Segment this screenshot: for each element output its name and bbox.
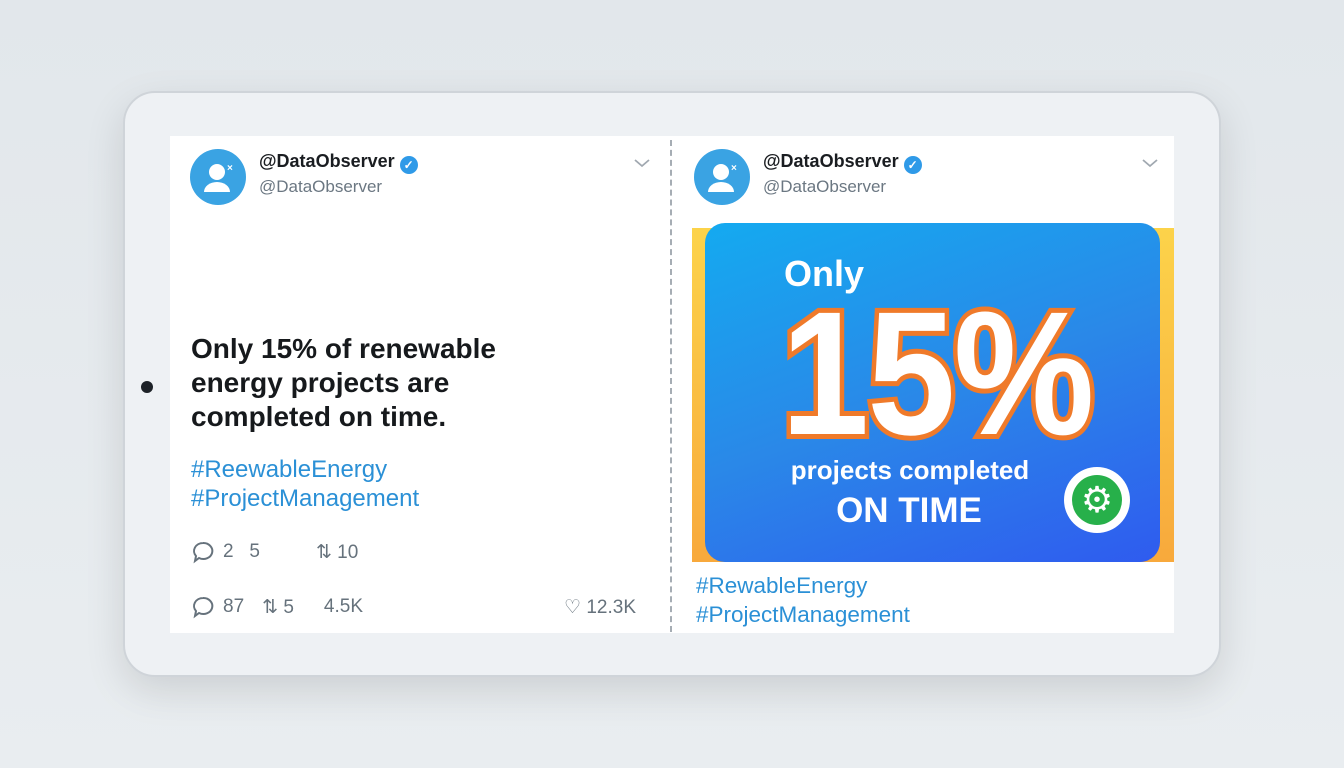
tweet text: completed on time. xyxy=(191,401,446,432)
camera dot xyxy=(141,381,153,393)
stats row 2: 87 xyxy=(223,596,244,617)
15%: 15% xyxy=(781,276,1093,472)
ON TIME: ON TIME xyxy=(836,491,982,530)
user name: ✓ xyxy=(908,158,918,172)
icon: gear xyxy=(1064,467,1130,533)
stat card xyxy=(692,223,1174,562)
chevron xyxy=(1142,160,1158,167)
blue card xyxy=(705,223,1160,562)
stats row 2: ⇅ 5 xyxy=(262,596,294,618)
hashtags xyxy=(696,573,910,627)
stats row 2: 4.5K xyxy=(324,596,363,617)
hashtags xyxy=(191,456,419,512)
icon: gear: ⚙ xyxy=(1081,479,1113,520)
Only: Only xyxy=(784,253,864,294)
avatar: × xyxy=(731,163,737,174)
avatar: × xyxy=(227,163,233,174)
panel: left tweet xyxy=(190,149,650,618)
panel: right tweet xyxy=(694,149,1158,627)
user name: ✓ xyxy=(404,158,414,172)
user name: @DataObserver xyxy=(259,151,395,171)
avatar xyxy=(190,149,246,205)
hashtags: #ProjectManagement xyxy=(696,602,910,627)
device frame xyxy=(123,91,1221,677)
15%: 15% xyxy=(781,276,1093,472)
hashtags: #RewableEnergy xyxy=(696,573,867,598)
projects completed: projects completed xyxy=(791,455,1029,485)
yellow back xyxy=(692,228,1174,562)
chevron xyxy=(634,160,650,167)
hashtags: #ProjectManagement xyxy=(191,485,419,512)
tweet text xyxy=(191,333,496,432)
user name: @DataObserver xyxy=(763,151,899,171)
tweet text: Only 15% of renewable xyxy=(191,333,496,364)
stats row 2: ♡ 12.3K xyxy=(564,596,636,618)
hashtags: #ReewableEnergy xyxy=(191,456,387,483)
divider xyxy=(670,140,672,632)
avatar xyxy=(694,149,750,205)
tweet text: energy projects are xyxy=(191,367,449,398)
stats row 1 xyxy=(193,541,358,564)
stats row 1: 2 5 xyxy=(223,541,260,562)
stats row 2 xyxy=(193,596,636,618)
handle: @DataObserver xyxy=(763,177,886,196)
handle: @DataObserver xyxy=(259,177,382,196)
screen xyxy=(170,136,1174,633)
stats row 1: ⇅ 10 xyxy=(316,542,358,562)
